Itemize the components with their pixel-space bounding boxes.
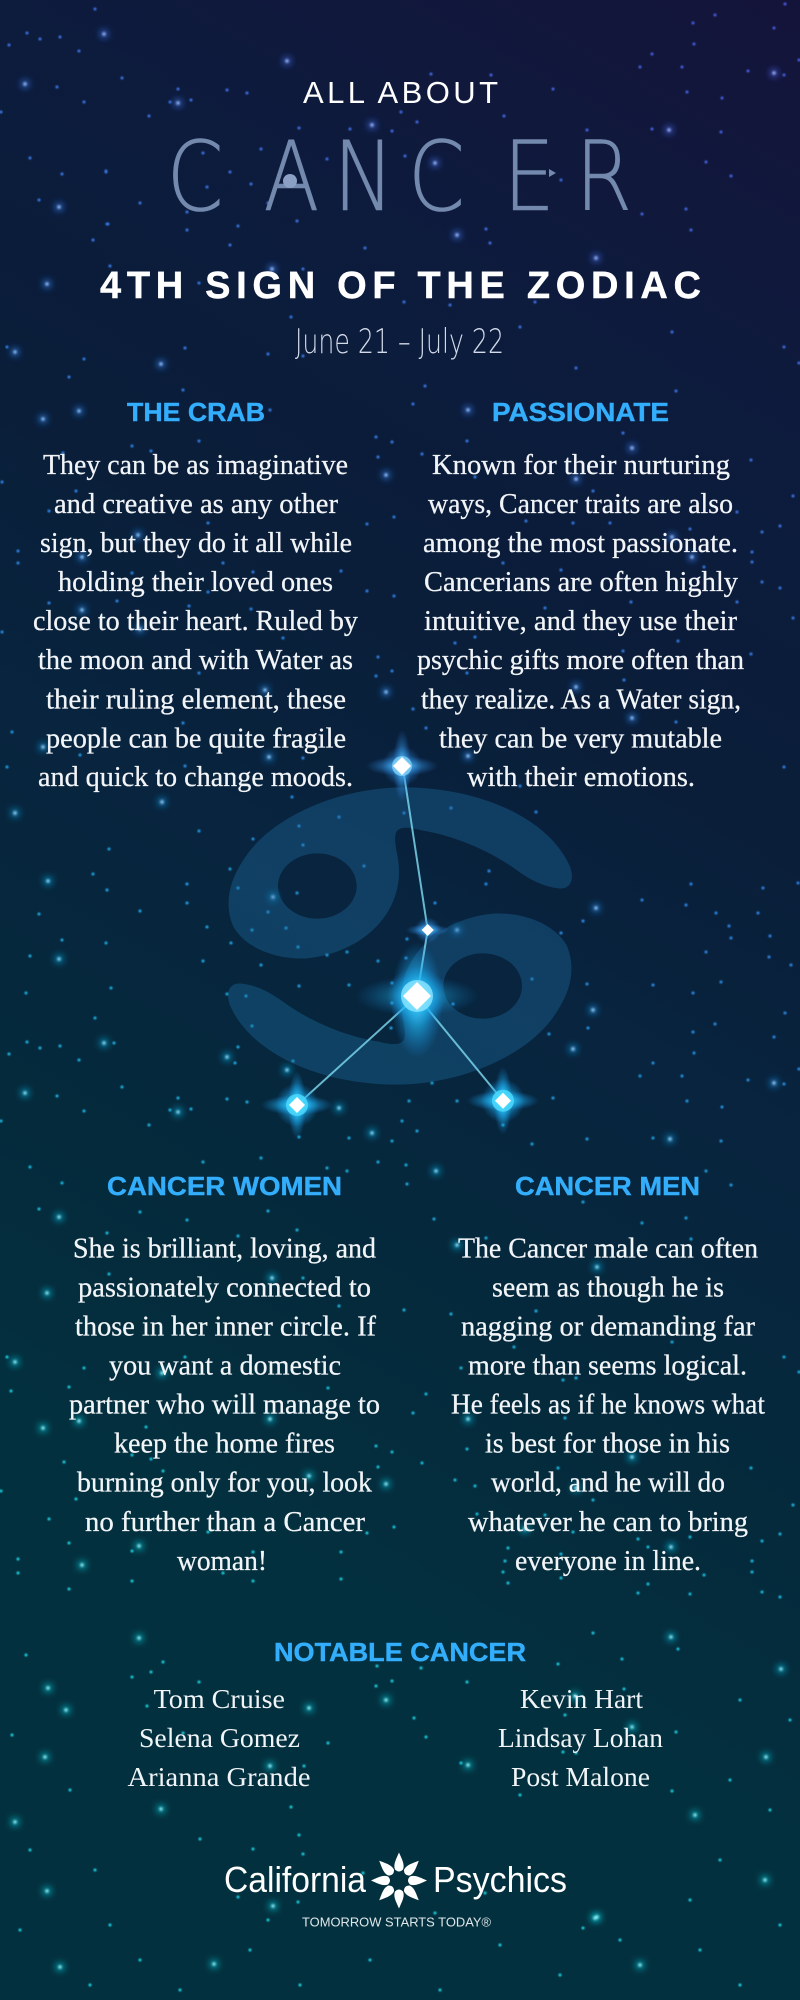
logo wordmark right: Psychics: [433, 1859, 567, 1900]
text block: the crab: holding their loved ones: [58, 567, 333, 598]
panel: notable cancer: [128, 1637, 664, 1792]
text block: cancer men: nagging or demanding far: [461, 1311, 756, 1342]
subtitle: 4th sign of the zodiac: 4TH SIGN OF THE ZODIAC: [100, 265, 701, 307]
names: left column: Selena Gomez: [139, 1723, 300, 1753]
text block: cancer men: more than seems logical.: [468, 1350, 747, 1381]
text block: the crab: close to their heart. Ruled by: [33, 606, 358, 637]
text block: cancer women: passionately connected to: [78, 1273, 371, 1304]
heading: cancer women: CANCER WOMEN: [107, 1171, 342, 1201]
panel: the crab: [33, 397, 358, 793]
star: main bright: [355, 942, 479, 1058]
text block: cancer women: burning only for you, look: [77, 1468, 372, 1499]
logo tagline: TOMORROW STARTS TODAY®: [302, 1914, 491, 1930]
text block: cancer women: partner who will manage to: [69, 1389, 380, 1420]
text block: cancer men: [451, 1234, 765, 1577]
heading: passionate: PASSIONATE: [492, 397, 669, 427]
heading: the crab: THE CRAB: [127, 397, 265, 427]
text block: passionate: psychic gifts more often than: [417, 645, 744, 676]
text block: the crab: sign, but they do it all while: [40, 528, 352, 559]
text block: cancer women: you want a domestic: [109, 1350, 341, 1381]
logo: California Psychics: [224, 1852, 567, 1930]
names: right column: Post Malone: [511, 1762, 650, 1792]
star: lower right: [467, 1067, 539, 1135]
names: right column: Kevin Hart: [520, 1684, 643, 1714]
text block: passionate: they realize. As a Water sign,: [421, 684, 741, 716]
text block: cancer men: everyone in line.: [515, 1546, 701, 1577]
glyph lower claw: [228, 913, 571, 1085]
names: right column: [498, 1684, 664, 1792]
text block: cancer women: no further than a Cancer: [85, 1507, 366, 1538]
heading: notable cancer: NOTABLE CANCER: [274, 1637, 526, 1667]
names: right column: Lindsay Lohan: [498, 1723, 664, 1753]
text block: cancer women: [69, 1234, 380, 1577]
panel: cancer men: [451, 1171, 765, 1577]
logo wordmark left: California: [224, 1859, 367, 1900]
text block: passionate: with their emotions.: [467, 762, 695, 793]
star: lower left: [261, 1071, 333, 1139]
text block: passionate: among the most passionate.: [423, 528, 738, 559]
panel: cancer women: [69, 1171, 380, 1577]
text block: cancer women: those in her inner circle. If: [75, 1311, 377, 1342]
title: All About: ALL ABOUT: [303, 75, 498, 110]
title: Cancer: CANCER: [167, 122, 632, 234]
constellation: [261, 730, 539, 1139]
text block: the crab: people can be quite fragile: [46, 724, 346, 754]
text block: cancer men: whatever he can to bring: [468, 1507, 748, 1538]
names: left column: [128, 1684, 311, 1792]
text block: cancer women: keep the home fires: [114, 1429, 335, 1460]
text block: the crab: [33, 450, 358, 793]
icon: logo star: [371, 1852, 427, 1908]
text block: cancer men: seem as though he is: [492, 1273, 724, 1304]
text block: passionate: Known for their nurturing: [432, 450, 730, 481]
text block: passionate: ways, Cancer traits are also: [428, 489, 733, 520]
text block: passionate: [417, 450, 744, 793]
panel: passionate: [417, 397, 744, 793]
text block: passionate: intuitive, and they use their: [424, 606, 738, 637]
glyph upper claw: [229, 787, 572, 959]
text block: cancer men: is best for those in his: [485, 1429, 730, 1460]
text block: cancer men: The Cancer male can often: [458, 1234, 758, 1265]
names: left column: Arianna Grande: [128, 1762, 311, 1792]
dates: June 21 – July 22: [295, 322, 504, 362]
zodiac glyph: Cancer symbol: [228, 787, 572, 1085]
text block: cancer women: woman!: [177, 1546, 267, 1577]
text block: cancer women: She is brilliant, loving, and: [73, 1234, 376, 1265]
text block: cancer men: He feels as if he knows what: [451, 1389, 765, 1420]
text block: the crab: and quick to change moods.: [38, 762, 353, 793]
text block: the crab: and creative as any other: [54, 489, 339, 520]
text block: the crab: They can be as imaginative: [43, 450, 348, 481]
text block: passionate: they can be very mutable: [439, 724, 722, 754]
text block: the crab: their ruling element, these: [46, 684, 346, 716]
heading: cancer men: CANCER MEN: [515, 1171, 700, 1201]
text block: the crab: the moon and with Water as: [38, 645, 353, 676]
star: middle: [406, 917, 450, 943]
star: top: [366, 730, 438, 802]
text block: passionate: Cancerians are often highly: [424, 567, 738, 598]
names: left column: Tom Cruise: [154, 1684, 285, 1714]
text block: cancer men: world, and he will do: [491, 1468, 725, 1499]
constellation lines: [297, 768, 503, 1105]
